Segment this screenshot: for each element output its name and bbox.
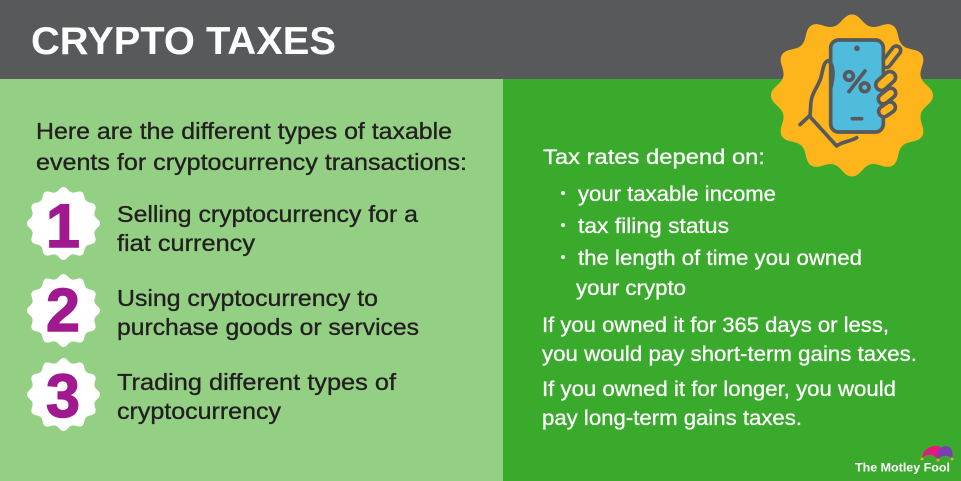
tax rate factors list	[561, 182, 862, 300]
panel: left light green	[0, 79, 503, 481]
logo wordmark: The Motley Fool	[855, 460, 950, 474]
intro text: events for cryptocurrency transactions:	[36, 149, 467, 175]
icon: number badge 2: 2	[46, 276, 80, 344]
icon: number badge 1: 1	[46, 192, 80, 260]
icon: hand holding phone with percent badge	[771, 14, 933, 176]
tax rate factors list: your taxable income	[578, 182, 776, 206]
list item 3	[27, 358, 397, 431]
long-term text: If you owned it for longer, you would	[542, 377, 896, 401]
intro text	[36, 118, 467, 175]
item 1 text: fiat currency	[117, 230, 256, 256]
tax rate factors list: your crypto	[576, 276, 686, 300]
item 3 text: cryptocurrency	[117, 398, 282, 424]
item 3 text	[117, 369, 397, 424]
icon: number badge 3	[27, 358, 100, 431]
icon: number badge 2	[27, 274, 100, 347]
logo: The Motley Fool	[855, 446, 954, 474]
icon: jester hat	[920, 446, 954, 462]
item 1 text	[117, 201, 418, 256]
long-term text	[542, 377, 896, 430]
item 2 text: Using cryptocurrency to	[117, 285, 378, 311]
tax rate factors list: the length of time you owned	[578, 246, 862, 270]
intro text: Here are the different types of taxable	[36, 118, 452, 144]
panel: right green	[503, 79, 961, 481]
item 3 text: Trading different types of	[117, 369, 397, 395]
short-term text: If you owned it for 365 days or less,	[542, 313, 889, 337]
item 1 text: Selling cryptocurrency for a	[117, 201, 418, 227]
tax rate factors list: tax filing status	[578, 214, 729, 238]
list item 1	[27, 187, 418, 260]
item 2 text: purchase goods or services	[117, 314, 419, 340]
tax rates heading: Tax rates depend on:	[543, 145, 765, 169]
list item 2	[27, 274, 419, 347]
short-term text	[542, 313, 917, 366]
header band	[0, 0, 961, 79]
long-term text: pay long-term gains taxes.	[542, 406, 802, 430]
short-term text: you would pay short-term gains taxes.	[542, 342, 917, 366]
title: CRYPTO TAXES	[31, 20, 336, 63]
icon: number badge 3: 3	[46, 362, 80, 430]
icon: number badge 1	[27, 187, 100, 260]
item 2 text	[117, 285, 419, 340]
